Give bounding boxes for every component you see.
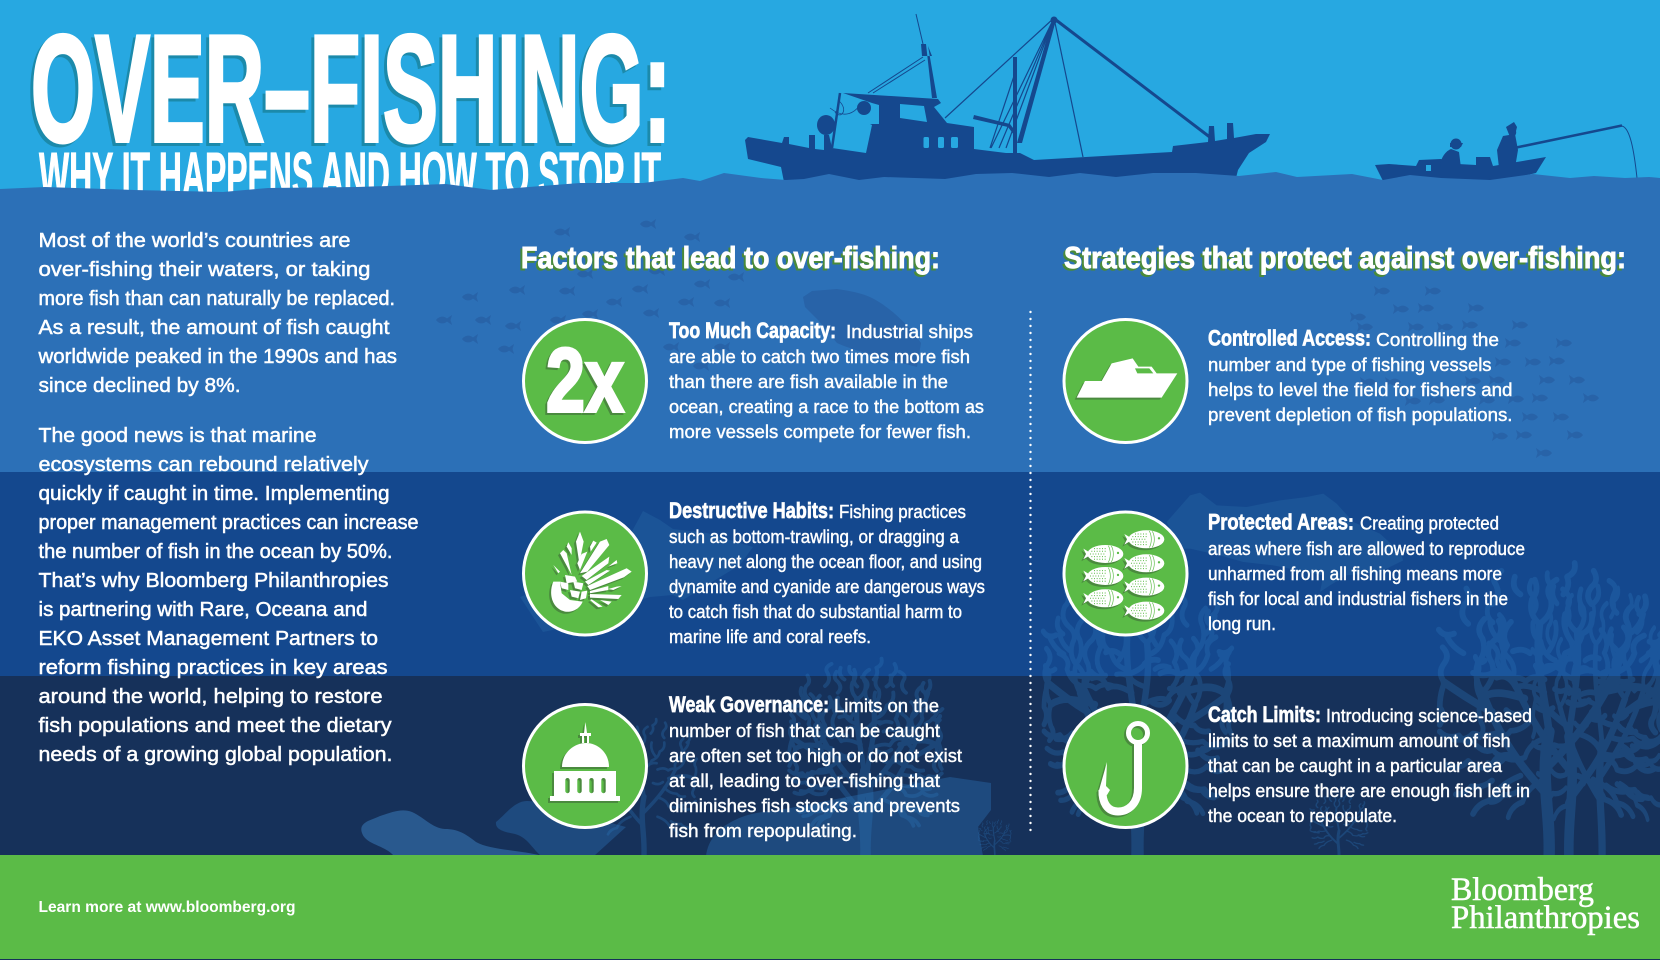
icon: hook badge bbox=[1064, 704, 1187, 828]
sky background bbox=[0, 0, 1660, 200]
factor: too much capacity: are able to catch two times more fish bbox=[669, 347, 970, 367]
icon: 2x badge: 2x bbox=[546, 330, 624, 432]
icon: fishing trawler silhouette bbox=[745, 14, 1270, 182]
title: OVER–FISHING: bbox=[31, 4, 671, 174]
strategy: catch limits: limits to set a maximum amount of fish bbox=[1208, 731, 1510, 751]
factor: destructive habits: heavy net along the ocean floor, and using bbox=[669, 552, 982, 572]
factor: destructive habits: dynamite and cyanide are dangerous ways bbox=[669, 577, 985, 597]
strategy: controlled access: Controlled Access: bbox=[1208, 326, 1371, 350]
factor: too much capacity bbox=[669, 318, 984, 442]
logo: Bloomberg Philanthropies: Philanthropies bbox=[1451, 900, 1640, 936]
good news text bbox=[38, 425, 418, 766]
factor: too much capacity: more vessels compete for fewer fish. bbox=[669, 422, 971, 442]
good news text: That’s why Bloomberg Philanthropies bbox=[38, 570, 388, 592]
strategy: controlled access: prevent depletion of fish populations. bbox=[1208, 405, 1512, 425]
good news text: is partnering with Rare, Oceana and bbox=[38, 599, 368, 621]
icon: boat badge bbox=[1064, 320, 1187, 442]
icon: explosion badge bbox=[524, 512, 646, 635]
factor: weak governance: Weak Governance: bbox=[669, 692, 829, 717]
intro text: more fish than can naturally be replaced. bbox=[38, 288, 395, 310]
factor: weak governance: are often set too high or do not exist bbox=[669, 746, 962, 766]
strategy: catch limits: Introducing science-based bbox=[1326, 706, 1532, 726]
factor: too much capacity: ocean, creating a race to the bottom as bbox=[669, 397, 984, 417]
strategy: protected areas: Protected Areas: bbox=[1208, 510, 1354, 534]
intro text bbox=[37, 230, 397, 397]
school of fish: left bbox=[436, 219, 744, 371]
good news text: ecosystems can rebound relatively bbox=[38, 454, 369, 476]
strategy: protected areas: Creating protected bbox=[1360, 514, 1499, 534]
good news text: needs of a growing global population. bbox=[38, 744, 392, 766]
factor: weak governance: Limits on the bbox=[834, 696, 939, 716]
dotted divider bbox=[1029, 312, 1032, 831]
school of fish: right bbox=[1350, 286, 1599, 458]
good news text: around the world, helping to restore bbox=[38, 686, 382, 708]
intro text: As a result, the amount of fish caught bbox=[38, 317, 390, 339]
strategy: controlled access: helps to level the field for fishers and bbox=[1208, 380, 1512, 400]
large fish silhouette: band 1 bbox=[803, 289, 921, 367]
intro text: over-fishing their waters, or taking bbox=[38, 259, 370, 281]
strategy: catch limits: Catch Limits: bbox=[1208, 702, 1321, 727]
factor: weak governance: fish from repopulating. bbox=[669, 821, 857, 841]
good news text: reform fishing practices in key areas bbox=[38, 657, 388, 679]
strategy: catch limits: that can be caught in a particular area bbox=[1208, 756, 1503, 776]
strategy: controlled access: number and type of fishing vessels bbox=[1208, 355, 1492, 375]
icon: fish badge bbox=[1064, 512, 1187, 635]
icon: capitol badge bbox=[524, 704, 646, 828]
factor: weak governance bbox=[669, 692, 962, 841]
seabed rocks bbox=[361, 777, 991, 856]
footer band bbox=[0, 855, 1660, 959]
strategy: catch limits bbox=[1208, 702, 1532, 826]
sea band 1 with wave edge bbox=[0, 172, 1660, 472]
strategy: controlled access bbox=[1208, 326, 1512, 425]
factor: weak governance: at all, leading to over-fishing that bbox=[669, 771, 940, 791]
coral silhouettes bbox=[592, 563, 1660, 860]
factor: weak governance: diminishes fish stocks and prevents bbox=[669, 796, 960, 816]
icon: 2x badge bbox=[524, 320, 646, 442]
large fish silhouette: band 2 left bbox=[520, 511, 753, 632]
good news text: the number of fish in the ocean by 50%. bbox=[38, 541, 393, 563]
logo: Bloomberg Philanthropies: Bloomberg bbox=[1451, 872, 1594, 908]
intro text: since declined by 8%. bbox=[38, 375, 240, 397]
footer bottom edge bbox=[0, 959, 1660, 960]
factor: destructive habits: Fishing practices bbox=[839, 502, 966, 522]
factor: destructive habits: Destructive Habits: bbox=[669, 498, 834, 523]
logo: Bloomberg Philanthropies bbox=[1451, 872, 1640, 936]
sea band 2 bbox=[0, 472, 1660, 676]
icon: small boat with two fishers bbox=[1375, 122, 1637, 182]
large fish silhouette: band 2 right bbox=[1167, 493, 1403, 592]
strategy: protected areas bbox=[1208, 510, 1525, 634]
good news text: fish populations and meet the dietary bbox=[38, 715, 392, 737]
strategy: protected areas: long run. bbox=[1208, 614, 1276, 634]
factor: destructive habits: to catch fish that do substantial harm to bbox=[669, 602, 962, 622]
good news text: quickly if caught in time. Implementing bbox=[38, 483, 390, 505]
factor: destructive habits bbox=[669, 498, 985, 647]
good news text: The good news is that marine bbox=[38, 425, 316, 447]
strategy: protected areas: fish for local and industrial fishers in the bbox=[1208, 589, 1508, 609]
strategy: catch limits: the ocean to repopulate. bbox=[1208, 806, 1397, 826]
heading: factors: Factors that lead to over-fishing: bbox=[521, 240, 940, 275]
factor: destructive habits: such as bottom-trawling, or dragging a bbox=[669, 527, 960, 547]
strategy: catch limits: helps ensure there are enough fish left in bbox=[1208, 781, 1530, 801]
good news text: EKO Asset Management Partners to bbox=[38, 628, 378, 650]
intro text: worldwide peaked in the 1990s and has bbox=[37, 346, 397, 368]
factor: destructive habits: marine life and coral reefs. bbox=[669, 627, 871, 647]
text: WHY IT HAPPENS AND HOW TO STOP IT bbox=[39, 139, 661, 211]
intro text: Most of the world’s countries are bbox=[38, 230, 350, 252]
factor: too much capacity: Industrial ships bbox=[846, 322, 973, 342]
factor: too much capacity: than there are fish available in the bbox=[669, 372, 948, 392]
footer link text: Learn more at www.bloomberg.org bbox=[38, 899, 296, 916]
factor: too much capacity: Too Much Capacity: bbox=[669, 318, 836, 343]
strategy: controlled access: Controlling the bbox=[1376, 330, 1499, 350]
strategy: protected areas: unharmed from all fishing means more bbox=[1208, 564, 1502, 584]
sea band 3 bbox=[0, 676, 1660, 856]
factor: weak governance: number of fish that can be caught bbox=[669, 721, 940, 741]
strategy: protected areas: areas where fish are allowed to reproduce bbox=[1208, 539, 1525, 559]
good news text: proper management practices can increase bbox=[38, 512, 418, 534]
